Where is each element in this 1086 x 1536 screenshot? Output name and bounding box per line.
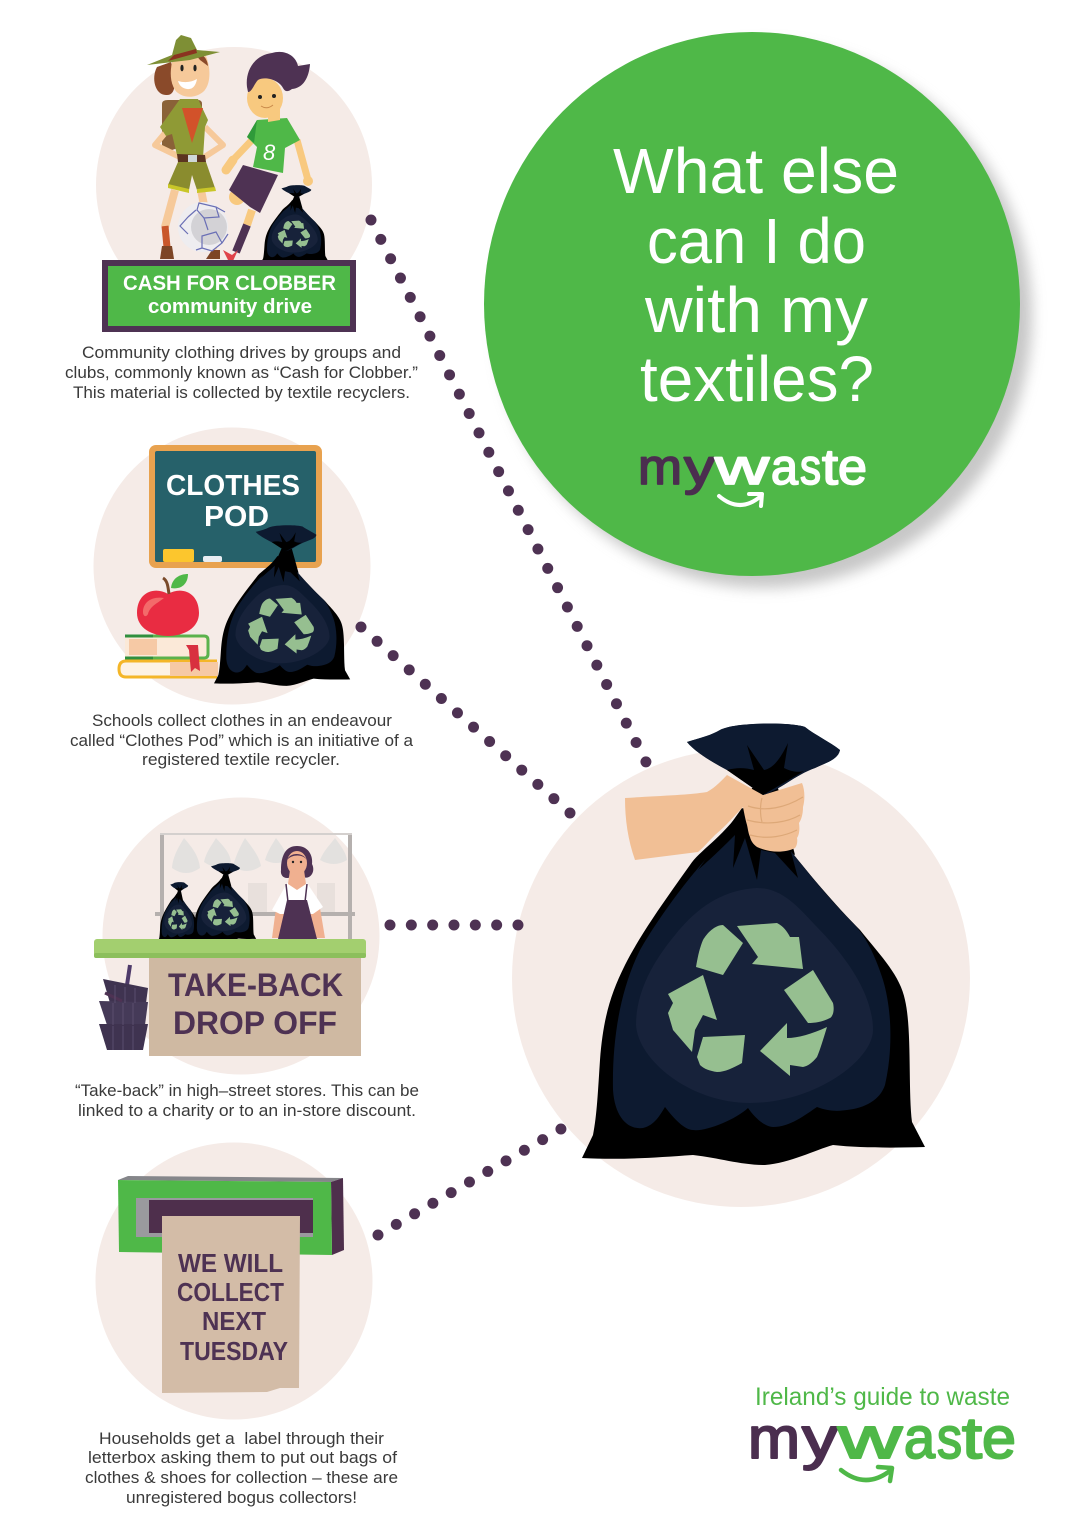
text block: take-back caption xyxy=(75,1082,419,1120)
title xyxy=(613,135,899,415)
icon: footballer: 8 xyxy=(263,140,276,165)
icon: shop assistant xyxy=(272,846,325,939)
icon: counter with sign: TAKE-BACK xyxy=(168,967,343,1003)
title: can I do xyxy=(647,205,866,277)
icon: label: NEXT xyxy=(202,1306,266,1336)
logo: footer mywaste: m xyxy=(748,1406,800,1471)
logo: footer mywaste: e xyxy=(982,1406,1016,1471)
illustration: take-back counter xyxy=(94,833,366,1056)
text block: cash for clobber caption: This material is collected by textile recyclers. xyxy=(73,384,410,402)
icon: clothes rack xyxy=(155,833,355,939)
text block: clothes pod caption: Schools collect clothes in an endeavour xyxy=(92,712,393,730)
logo: mywaste in circle: e xyxy=(838,439,867,495)
logo: footer mywaste: Ireland’s guide to waste xyxy=(755,1383,1010,1411)
text block: labels caption: Households get a label through their xyxy=(99,1430,385,1448)
icon: small bag xyxy=(261,185,328,264)
icon: bags xyxy=(158,882,198,942)
text block: labels caption xyxy=(85,1430,398,1507)
text block: take-back caption: linked to a charity or to an in-store discount. xyxy=(78,1102,416,1120)
text block: labels caption: letterbox asking them to put out bags of xyxy=(88,1449,397,1467)
logo: mywaste in circle: y xyxy=(684,439,715,495)
logo: mywaste in circle: m xyxy=(638,439,682,495)
icon: label: TUESDAY xyxy=(180,1336,288,1366)
logo: footer mywaste: y xyxy=(802,1406,838,1471)
logo: mywaste in circle: t xyxy=(822,439,838,495)
sign: cash for clobber: community drive xyxy=(148,296,312,318)
icon: counter with sign: DROP OFF xyxy=(173,1005,337,1041)
icon: chalkboard: CLOTHES xyxy=(166,470,300,502)
panel: cash for clobber circle xyxy=(96,47,372,323)
logo: footer mywaste: s xyxy=(937,1406,962,1471)
logo: footer mywaste: a xyxy=(904,1406,936,1471)
panel: label collection circle xyxy=(96,1142,372,1420)
title: What else xyxy=(613,135,899,207)
text block: labels caption: unregistered bogus collectors! xyxy=(126,1489,357,1507)
arrow: dotted line from clothes pod xyxy=(361,627,570,813)
icon: scout xyxy=(147,35,223,259)
panel: central bag circle xyxy=(512,749,970,1207)
logo: footer mywaste xyxy=(748,1383,1016,1481)
text block: clothes pod caption xyxy=(70,712,414,769)
icon: counter with sign xyxy=(94,939,366,1056)
sign: cash for clobber: CASH FOR CLOBBER xyxy=(123,272,336,295)
icon: books xyxy=(119,636,218,677)
title: textiles? xyxy=(640,343,874,415)
icon: footballer xyxy=(223,52,313,261)
logo: mywaste in circle xyxy=(638,439,867,506)
panel: take-back circle xyxy=(102,798,380,1074)
text block: clothes pod caption: called “Clothes Pod” which is an initiative of a xyxy=(70,732,414,750)
icon: football xyxy=(178,202,228,252)
logo: mywaste in circle: s xyxy=(800,439,821,495)
text block: cash for clobber caption: clubs, commonly known as “Cash for Clobber.” xyxy=(65,364,418,382)
illustration: clothes pod school xyxy=(119,445,350,686)
icon: label: COLLECT xyxy=(177,1277,284,1307)
text block: cash for clobber caption: Community clothing drives by groups and xyxy=(82,344,401,362)
icon: label xyxy=(162,1216,300,1393)
arrow: dotted line from clobber xyxy=(371,220,646,762)
text block: clothes pod caption: registered textile recycler. xyxy=(142,751,340,769)
panel: title circle xyxy=(484,32,1032,588)
logo: mywaste in circle: a xyxy=(771,439,798,495)
illustration: scout and footballer xyxy=(102,35,356,332)
logo: footer mywaste: w xyxy=(836,1406,904,1471)
text block: labels caption: clothes & shoes for collection – these are xyxy=(85,1469,398,1487)
icon: apple xyxy=(137,574,199,636)
text block: take-back caption: “Take-back” in high–street stores. This can be xyxy=(75,1082,419,1100)
icon: chalkboard xyxy=(149,445,322,568)
icon: baskets xyxy=(99,965,148,1050)
title: with my xyxy=(644,274,868,346)
icon: hand holding recycling bag xyxy=(582,724,925,1165)
arrow: dotted line from labels xyxy=(378,1129,561,1235)
icon: letterbox xyxy=(118,1176,344,1255)
icon: bag xyxy=(214,525,350,686)
illustration: letterbox with label xyxy=(118,1176,344,1393)
arrow: dotted line from take-back xyxy=(390,920,518,930)
logo: mywaste in circle: w xyxy=(714,439,770,495)
icon: label: WE WILL xyxy=(178,1248,283,1278)
icon: chalkboard: POD xyxy=(204,501,269,533)
panel: clothes pod circle xyxy=(94,428,370,704)
text block: cash for clobber caption xyxy=(65,344,418,402)
logo: footer mywaste: t xyxy=(962,1406,982,1471)
sign: cash for clobber xyxy=(102,260,356,332)
